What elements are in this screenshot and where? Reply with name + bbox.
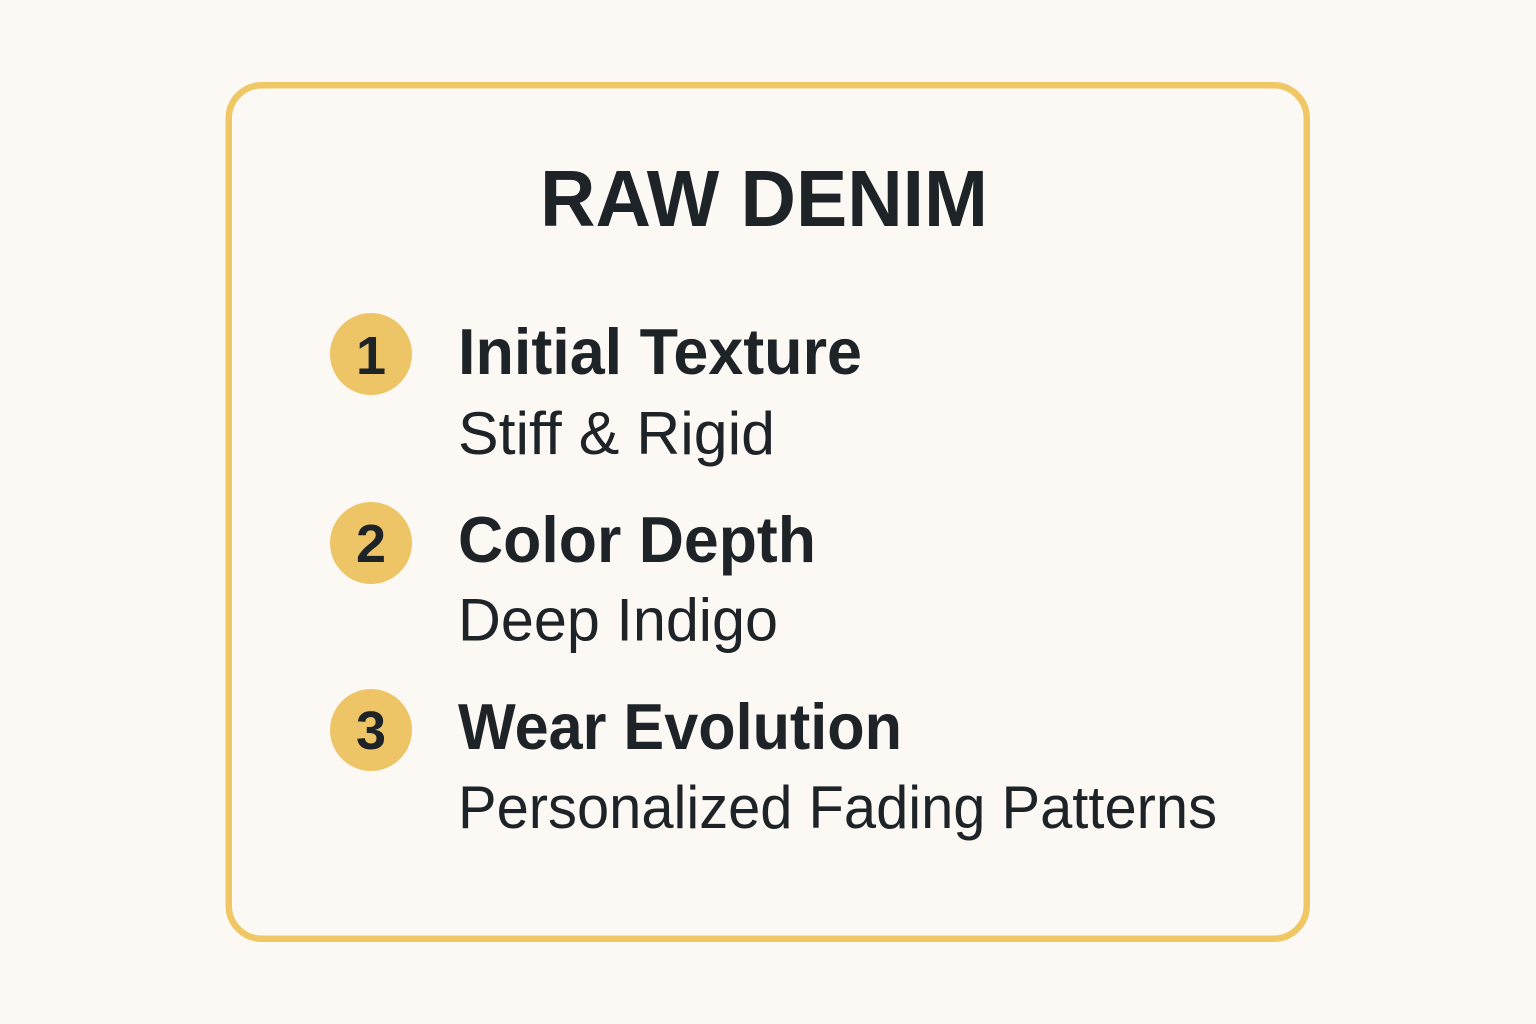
panel: raw denim card	[229, 85, 1307, 939]
heading: wear evolution: Wear Evolution	[458, 690, 902, 763]
icon: number 3 badge	[330, 689, 412, 771]
icon: number 2 badge	[330, 502, 412, 584]
text: personalized fading patterns: Personalized Fading Patterns	[458, 774, 1217, 841]
item 2: color depth	[330, 502, 816, 654]
item 1: initial texture	[330, 313, 862, 467]
item 3: wear evolution	[330, 689, 1217, 841]
title: RAW DENIM	[540, 154, 988, 243]
icon: number 3 badge: 3	[356, 701, 386, 761]
icon: number 1 badge: 1	[356, 326, 386, 386]
heading: color depth: Color Depth	[458, 503, 816, 576]
text: deep indigo: Deep Indigo	[458, 586, 778, 654]
icon: number 1 badge	[330, 313, 412, 395]
text: stiff and rigid: Stiff & Rigid	[458, 400, 775, 467]
icon: number 2 badge: 2	[356, 514, 386, 574]
heading: initial texture: Initial Texture	[458, 315, 862, 388]
